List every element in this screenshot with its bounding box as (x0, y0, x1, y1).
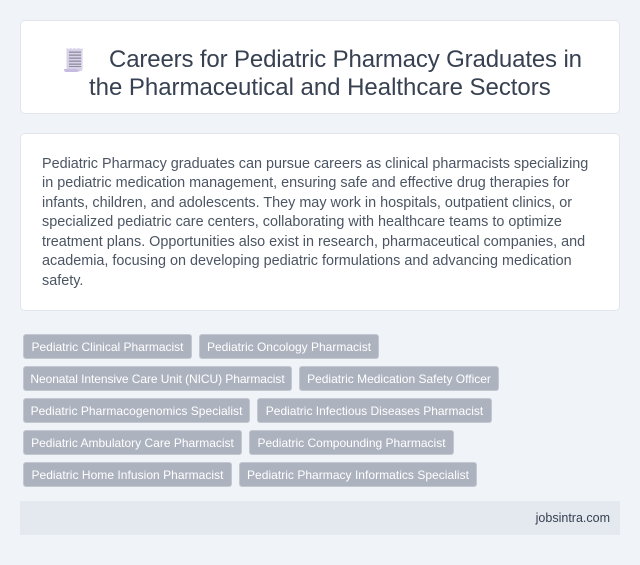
tag (239, 462, 477, 487)
tag (23, 398, 250, 423)
tag: Pediatric Clinical Pharmacist (31, 340, 184, 354)
tag: Neonatal Intensive Care Unit (NICU) Pharmacist (30, 372, 285, 386)
tag: Pediatric Home Infusion Pharmacist (31, 468, 224, 482)
heading: title: the Pharmaceutical and Healthcare Sectors (89, 74, 551, 101)
footer (20, 501, 620, 535)
tag (257, 398, 492, 423)
tag (299, 366, 499, 391)
text block: description: specialized pediatric care centers, collaborating with healthcare teams to optimize (42, 214, 562, 230)
panel: title card (20, 20, 620, 114)
tag: Pediatric Ambulatory Care Pharmacist (31, 436, 234, 450)
tag: Pediatric Pharmacy Informatics Specialist (247, 468, 469, 482)
icon: pharmacy receipt scroll (64, 48, 82, 72)
tag: Pediatric Oncology Pharmacist (207, 340, 371, 354)
tag: Pediatric Infectious Diseases Pharmacist (266, 404, 483, 418)
text block: description: safety. (42, 272, 83, 288)
panel: career tags (23, 334, 499, 487)
tag (249, 430, 454, 455)
panel: description (20, 133, 620, 311)
footer: jobsintra.com (536, 511, 610, 525)
tag (23, 462, 232, 487)
text block: description: in pediatric medication management, ensuring safe and effective drug therapies for (42, 175, 570, 191)
text block: description (42, 156, 588, 288)
heading: title: Careers for Pediatric Pharmacy Graduates in (109, 46, 582, 73)
text block: description: academia, focusing on developing pediatric formulations and advancing medication (42, 253, 572, 269)
tag (199, 334, 379, 359)
heading: title (89, 46, 582, 101)
text block: description: infants, children, and adolescents. They may work in hospitals, outpatient clinics, or (42, 194, 572, 210)
text block: description: Pediatric Pharmacy graduates can pursue careers as clinical pharmacists specializing (42, 156, 588, 172)
tag: Pediatric Compounding Pharmacist (257, 436, 446, 450)
text block: description: treatment plans. Opportunities also exist in research, pharmaceutical companies, and (42, 234, 585, 250)
tag: Pediatric Pharmacogenomics Specialist (31, 404, 242, 418)
tag (23, 366, 292, 391)
tag (23, 334, 192, 359)
tag: Pediatric Medication Safety Officer (307, 372, 491, 386)
tag (23, 430, 242, 455)
